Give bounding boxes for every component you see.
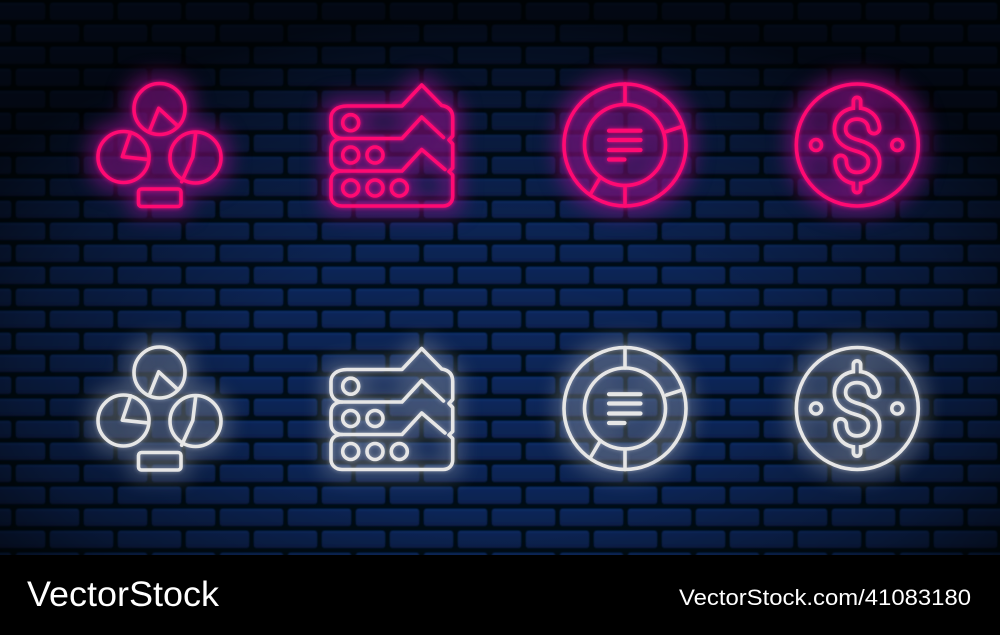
outer ring: [564, 84, 686, 206]
dollar sign: [820, 354, 900, 464]
icon: dollar coin, pink: [796, 84, 918, 206]
coin ring: [796, 84, 918, 206]
icon: dollar coin, white: [796, 348, 918, 470]
outer ring: [564, 348, 686, 470]
stack outline: [331, 348, 453, 470]
row indicators: [343, 115, 407, 196]
inner ring: [584, 104, 666, 186]
text lines: [609, 394, 640, 423]
minus bar: [138, 189, 181, 206]
dollar sign: [820, 90, 900, 200]
side dots: [810, 140, 903, 150]
icon: server stack with arrows, pink: [331, 85, 453, 206]
stack outline: [331, 85, 453, 206]
row indicators: [343, 378, 407, 460]
coin ring: [796, 348, 918, 470]
right pie: [170, 132, 221, 183]
icon: server stack with arrows, white: [331, 348, 453, 470]
icon: three pie charts, pink: [98, 84, 221, 206]
row dividers: [342, 117, 445, 171]
top pie: [134, 347, 185, 398]
footer bar: [0, 555, 1000, 635]
side dots: [810, 403, 903, 414]
icon: donut chart with text, pink: [564, 84, 686, 206]
inner ring: [584, 368, 666, 449]
top pie: [134, 84, 185, 134]
row dividers: [342, 380, 445, 434]
ring segments: [590, 348, 682, 470]
image id: VectorStock.com/41083180: [679, 585, 971, 610]
icon: three pie charts, white: [98, 347, 221, 470]
left pie: [98, 395, 149, 446]
icon: donut chart with text, white: [564, 348, 686, 470]
ring segments: [590, 84, 682, 206]
right pie: [170, 396, 221, 446]
brand wordmark: VectorStock: [27, 575, 220, 614]
minus bar: [138, 452, 181, 470]
left pie: [98, 132, 149, 182]
text lines: [609, 131, 640, 160]
